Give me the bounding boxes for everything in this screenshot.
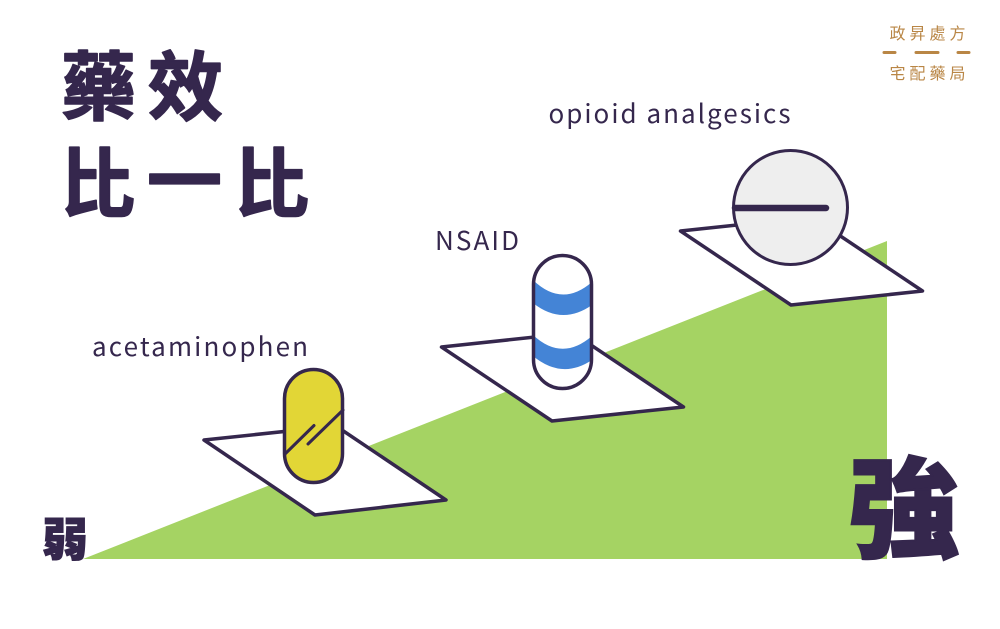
title: 藥: [61, 46, 136, 130]
green strength ramp: [83, 241, 887, 559]
label: opioid analgesics: opioid analgesics: [548, 94, 790, 131]
brand logo: [884, 25, 970, 83]
plate 1: [204, 426, 446, 515]
drug 1: acetaminophen: [92, 327, 446, 515]
title: 比: [234, 143, 309, 227]
icon: blue banded capsule: [533, 256, 592, 388]
title: 效: [148, 46, 223, 130]
weak label: 弱: [42, 514, 88, 566]
plate 3: [680, 217, 922, 305]
label: NSAID: NSAID: [435, 221, 519, 258]
icon: yellow capsule: [284, 370, 343, 482]
icon: round tablet: [734, 150, 848, 264]
brand logo: 政昇處方: [890, 25, 970, 43]
title: 比: [60, 143, 135, 227]
plate 2: [442, 333, 684, 421]
title: [60, 46, 309, 227]
label: acetaminophen: acetaminophen: [92, 327, 308, 364]
drug 2: NSAID: [435, 221, 684, 421]
strong label: 強: [849, 450, 959, 573]
brand logo: 宅配藥局: [890, 65, 970, 83]
drug 3: opioid analgesics: [548, 94, 922, 305]
title: 一: [147, 140, 222, 224]
